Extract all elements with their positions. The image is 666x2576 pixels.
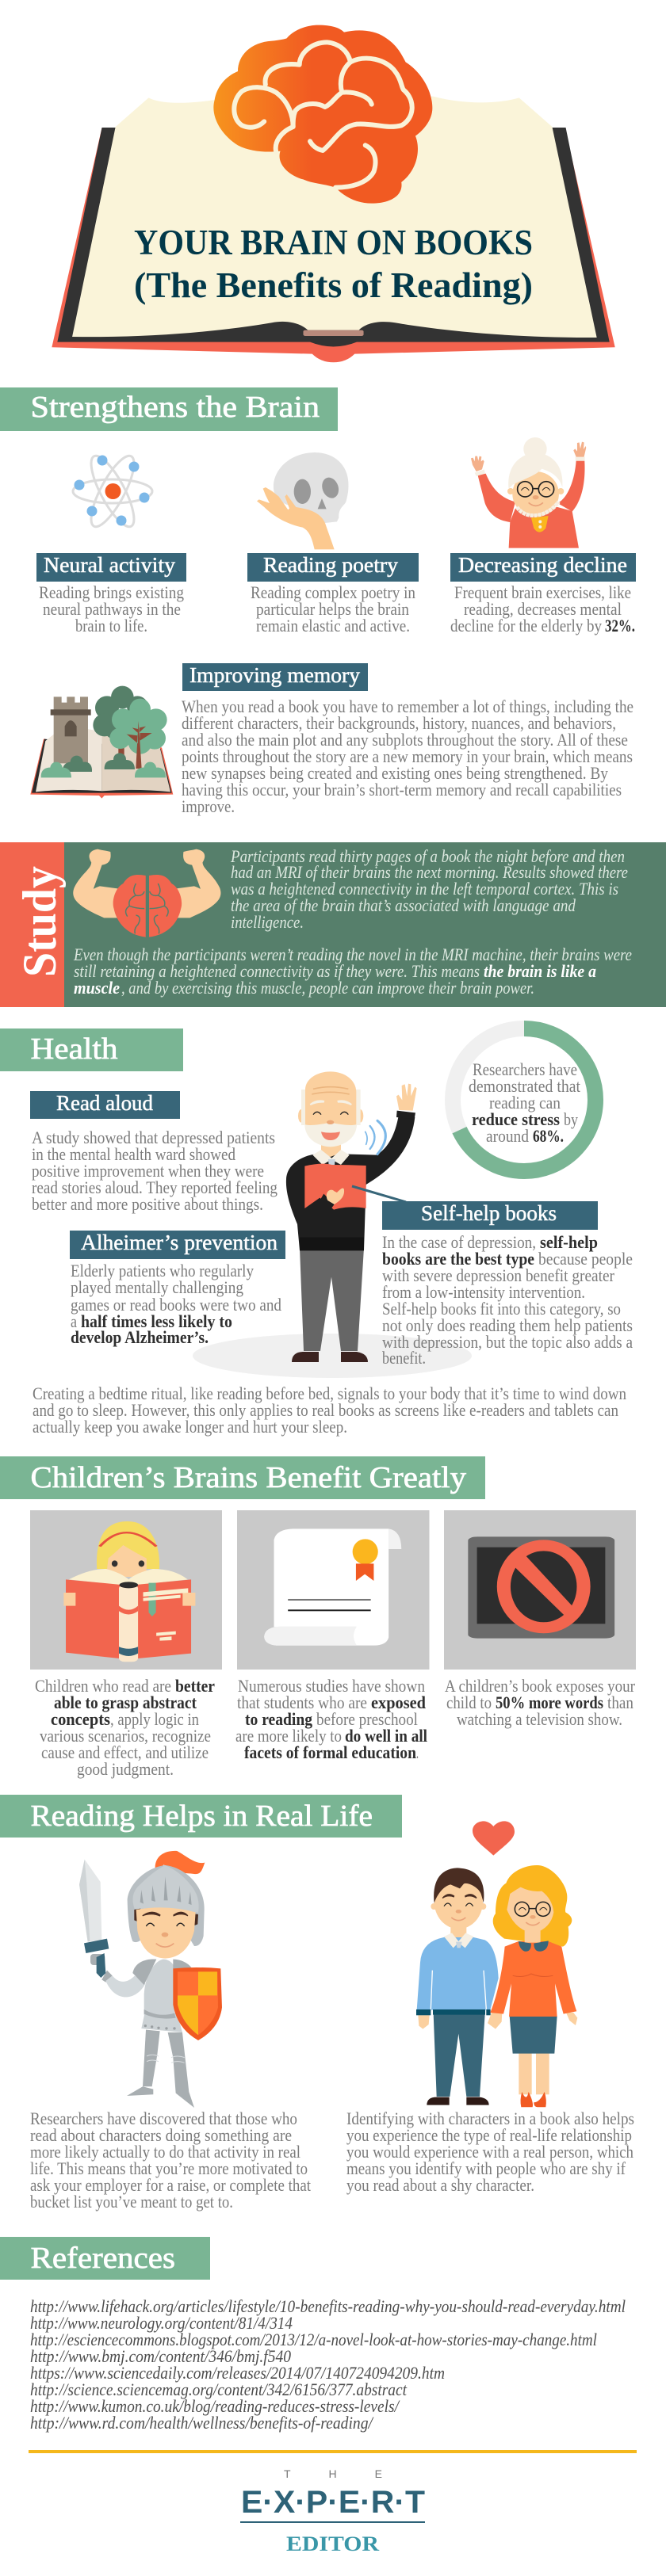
card: diploma: facets of formal education: [244, 1742, 416, 1762]
heading: reading helps in real life: [0, 1795, 402, 1838]
card: girl reading book: [30, 1510, 222, 1779]
block: reading poetry: [247, 553, 419, 635]
icon: atom: [73, 451, 152, 532]
heading: references: References: [30, 2242, 175, 2275]
card: television crossed out: child to: [446, 1693, 492, 1712]
block: decreasing decline: Frequent brain exercises, like: [454, 582, 631, 602]
text: real life behaviour: read about characters doing something are: [30, 2125, 292, 2145]
icon: orange brain: [213, 25, 432, 204]
list: reference links: http://science.sciencemag.org/content/342/6156/377.abstract: [30, 2379, 408, 2399]
illustration: old man reading aloud: [286, 1071, 417, 1362]
chart: 68 percent stress donut: 68%.: [533, 1126, 564, 1146]
chart: 68 percent stress donut: demonstrated that: [469, 1076, 580, 1096]
block: improving memory: [182, 663, 633, 816]
heading: strengthens the brain: [0, 387, 338, 431]
list: reference links: http://esciencecommons.blogspot.com/2013/12/a-novel-look-at-how-stories-may-change.html: [30, 2330, 597, 2349]
chart: 68 percent stress donut: reduce stress: [472, 1109, 560, 1129]
card: girl reading book: able to grasp abstract: [54, 1693, 197, 1712]
list: reference links: http://www.kumon.co.uk/blog/reading-reduces-stress-levels/: [30, 2396, 400, 2416]
card: girl reading book: concepts: [51, 1709, 110, 1729]
list: reference links: http://www.neurology.org/content/81/4/314: [30, 2313, 293, 2333]
card: diploma: to reading: [245, 1709, 312, 1729]
block: improving memory: new synapses being created and existing ones being strengthened. By: [182, 763, 608, 783]
block: alzheimer's prevention: Elderly patients who regularly: [71, 1261, 254, 1280]
card: television crossed out: A children’s book exposes your: [445, 1676, 636, 1696]
block: decreasing decline: [450, 553, 636, 635]
block: improving memory: improve.: [182, 796, 235, 816]
block: self-help books: benefit.: [382, 1348, 426, 1368]
block: read aloud: Read aloud: [56, 1091, 153, 1115]
list: reference links: http://www.bmj.com/content/346/bmj.f540: [30, 2346, 291, 2366]
heading: children's brains benefit greatly: [0, 1456, 485, 1499]
block: read aloud: A study showed that depressed patients: [32, 1128, 275, 1147]
chart: 68 percent stress donut: by: [564, 1109, 578, 1129]
text: study findings: still retaining a heightened connectivity as if they were. This means: [74, 961, 480, 981]
block: self-help books: Self-help books: [421, 1201, 557, 1225]
hero: open book with brain and title: [52, 25, 615, 362]
illustration: knight with sword and shield: [79, 1851, 222, 2108]
list: reference links: [30, 2296, 626, 2433]
text: real life behaviour: more likely actually to do that activity in real: [30, 2142, 300, 2162]
title: (The Benefits of Reading): [134, 265, 533, 305]
icon: muscular brain: [73, 849, 220, 937]
text: study findings: muscle: [74, 978, 120, 998]
heading: study vertical: Study: [13, 866, 66, 977]
block: alzheimer's prevention: a: [71, 1311, 77, 1331]
block: alzheimer's prevention: played mentally challenging: [71, 1277, 243, 1297]
block: reading poetry: remain elastic and active.: [256, 616, 410, 635]
block: self-help books: from a low-intensity intervention.: [382, 1282, 585, 1302]
block: read aloud: in the mental health ward showed: [32, 1144, 235, 1164]
block: self-help books: In the case of depression,: [382, 1232, 536, 1252]
block: self-help books: [382, 1201, 633, 1368]
card: girl reading book: , apply logic in: [110, 1709, 199, 1729]
text: study findings: the area of the brain that’s associated with language and: [231, 895, 576, 915]
logo: the expert editor: E·X·P·E·R·T: [241, 2485, 425, 2520]
text: real life behaviour: bucket list you’ve meant to get to.: [30, 2192, 233, 2212]
text: study findings: the brain is like a: [484, 961, 596, 981]
text: real life behaviour: life. This means that you’re more motivated to: [30, 2158, 308, 2178]
card: diploma: .: [416, 1742, 419, 1762]
card: diploma: do well in all: [345, 1726, 427, 1746]
block: alzheimer's prevention: Alheimer’s prevention: [81, 1231, 278, 1254]
block: self-help books: Self-help books fit into this category, so: [382, 1299, 621, 1319]
icon: skull in hand: [257, 452, 348, 549]
card: television crossed out: than: [607, 1693, 633, 1712]
panel: children's brains: [0, 1456, 636, 1779]
panel: strengthens the brain: [0, 387, 636, 816]
heading: health: Health: [30, 1032, 117, 1066]
card: diploma: are more likely to: [235, 1726, 342, 1746]
card: television crossed out: watching a television show.: [457, 1709, 622, 1729]
block: improving memory: Improving memory: [189, 663, 361, 687]
block: alzheimer's prevention: half times less likely to: [81, 1311, 232, 1331]
block: self-help books: not only does reading them help patients: [382, 1315, 633, 1335]
block: read aloud: positive improvement when they were: [32, 1161, 264, 1181]
block: alzheimer's prevention: games or read books were two and: [71, 1295, 281, 1315]
text: identifying with characters: means you identify with people who are shy if: [346, 2158, 626, 2178]
icon: castle and trees on book: [30, 686, 173, 799]
chart: 68 percent stress donut: [453, 1028, 595, 1171]
block: self-help books: with depression, but the topic also adds a: [382, 1332, 633, 1352]
text: study findings: [73, 846, 632, 998]
text: identifying with characters: [346, 2109, 634, 2195]
card: television crossed out: 50% more words: [496, 1693, 603, 1712]
card: girl reading book: various scenarios, recognize: [40, 1726, 211, 1746]
icon: happy grandmother: [471, 437, 586, 548]
card: diploma: before preschool: [316, 1709, 418, 1729]
block: read aloud: [30, 1091, 278, 1214]
block: decreasing decline: reading, decreases mental: [464, 599, 622, 619]
card: girl reading book: Children who read are: [35, 1676, 171, 1696]
text: real life behaviour: ask your employer for a raise, or complete that: [30, 2175, 311, 2195]
text: real life behaviour: Researchers have discovered that those who: [30, 2109, 297, 2128]
block: decreasing decline: decline for the elderly by: [450, 616, 602, 635]
block: reading poetry: particular helps the brain: [256, 599, 409, 619]
chart: 68 percent stress donut: around: [486, 1126, 529, 1146]
illustration: floor shadow: [193, 1334, 472, 1378]
block: decreasing decline: 32%.: [605, 616, 635, 635]
panel: references: [0, 2237, 626, 2433]
block: neural activity: [36, 553, 186, 635]
block: self-help books: books are the best type: [382, 1249, 534, 1269]
block: neural activity: Neural activity: [44, 553, 176, 577]
chart: 68 percent stress donut: reading can: [489, 1093, 561, 1112]
logo: the expert editor: THE: [284, 2467, 382, 2480]
text: study findings: , and by exercising this muscle, people can improve their brain power.: [121, 978, 534, 998]
heading: strengthens the brain: Strengthens the Brain: [30, 391, 320, 424]
block: decreasing decline: Decreasing decline: [458, 553, 627, 577]
panel: reading helps in real life: [0, 1795, 634, 2212]
block: neural activity: neural pathways in the: [43, 599, 181, 619]
card: diploma: exposed: [371, 1693, 426, 1712]
card: television crossed out: [444, 1510, 636, 1729]
block: read aloud: better and more positive about things.: [32, 1194, 263, 1214]
arrow: connector from book to self-help label: [352, 1186, 406, 1202]
heading: children's brains benefit greatly: Children’s Brains Benefit Greatly: [30, 1461, 466, 1494]
text: real life behaviour: [30, 2109, 311, 2212]
text: identifying with characters: you read about a shy character.: [346, 2175, 534, 2195]
list: reference links: https://www.sciencedaily.com/releases/2014/07/140724094209.htm: [30, 2363, 445, 2383]
block: alzheimer's prevention: develop Alzheimer’s.: [71, 1327, 209, 1347]
text: bedtime ritual: [33, 1383, 626, 1437]
card: diploma: that students who are: [237, 1693, 367, 1712]
text: study findings: intelligence.: [231, 912, 304, 932]
card: girl reading book: better: [175, 1676, 215, 1696]
logo: the expert editor: [240, 2467, 425, 2555]
block: self-help books: self-help: [540, 1232, 598, 1252]
card: girl reading book: cause and effect, and utilize: [41, 1742, 209, 1762]
heading: references: [0, 2237, 210, 2280]
panel: study: [0, 842, 666, 1007]
block: self-help books: because people: [538, 1249, 633, 1269]
block: read aloud: read stories aloud. They reported feeling: [32, 1177, 278, 1197]
block: reading poetry: Reading complex poetry in: [251, 582, 415, 602]
block: alzheimer's prevention: [70, 1231, 285, 1347]
block: reading poetry: Reading poetry: [263, 553, 398, 577]
text: bedtime ritual: actually keep you awake longer and hurt your sleep.: [33, 1417, 347, 1437]
logo: the expert editor: EDITOR: [286, 2532, 379, 2555]
heading: reading helps in real life: Reading Helps in Real Life: [30, 1799, 373, 1833]
card: diploma: [235, 1510, 430, 1762]
heading: health: [0, 1028, 183, 1071]
card: diploma: Numerous studies have shown: [238, 1676, 425, 1696]
card: girl reading book: good judgment.: [77, 1759, 174, 1779]
title: [134, 223, 533, 305]
panel: health: [0, 1028, 633, 1437]
list: reference links: http://www.rd.com/health/wellness/benefits-of-reading/: [30, 2413, 374, 2433]
block: self-help books: with severe depression benefit greater: [382, 1265, 615, 1285]
illustration: couple with heart: [416, 1821, 577, 2107]
title: YOUR BRAIN ON BOOKS: [134, 223, 533, 262]
illustration: open book: [52, 97, 615, 362]
block: neural activity: brain to life.: [75, 616, 147, 635]
block: neural activity: Reading brings existing: [39, 582, 184, 602]
chart: 68 percent stress donut: Researchers have: [473, 1059, 577, 1079]
